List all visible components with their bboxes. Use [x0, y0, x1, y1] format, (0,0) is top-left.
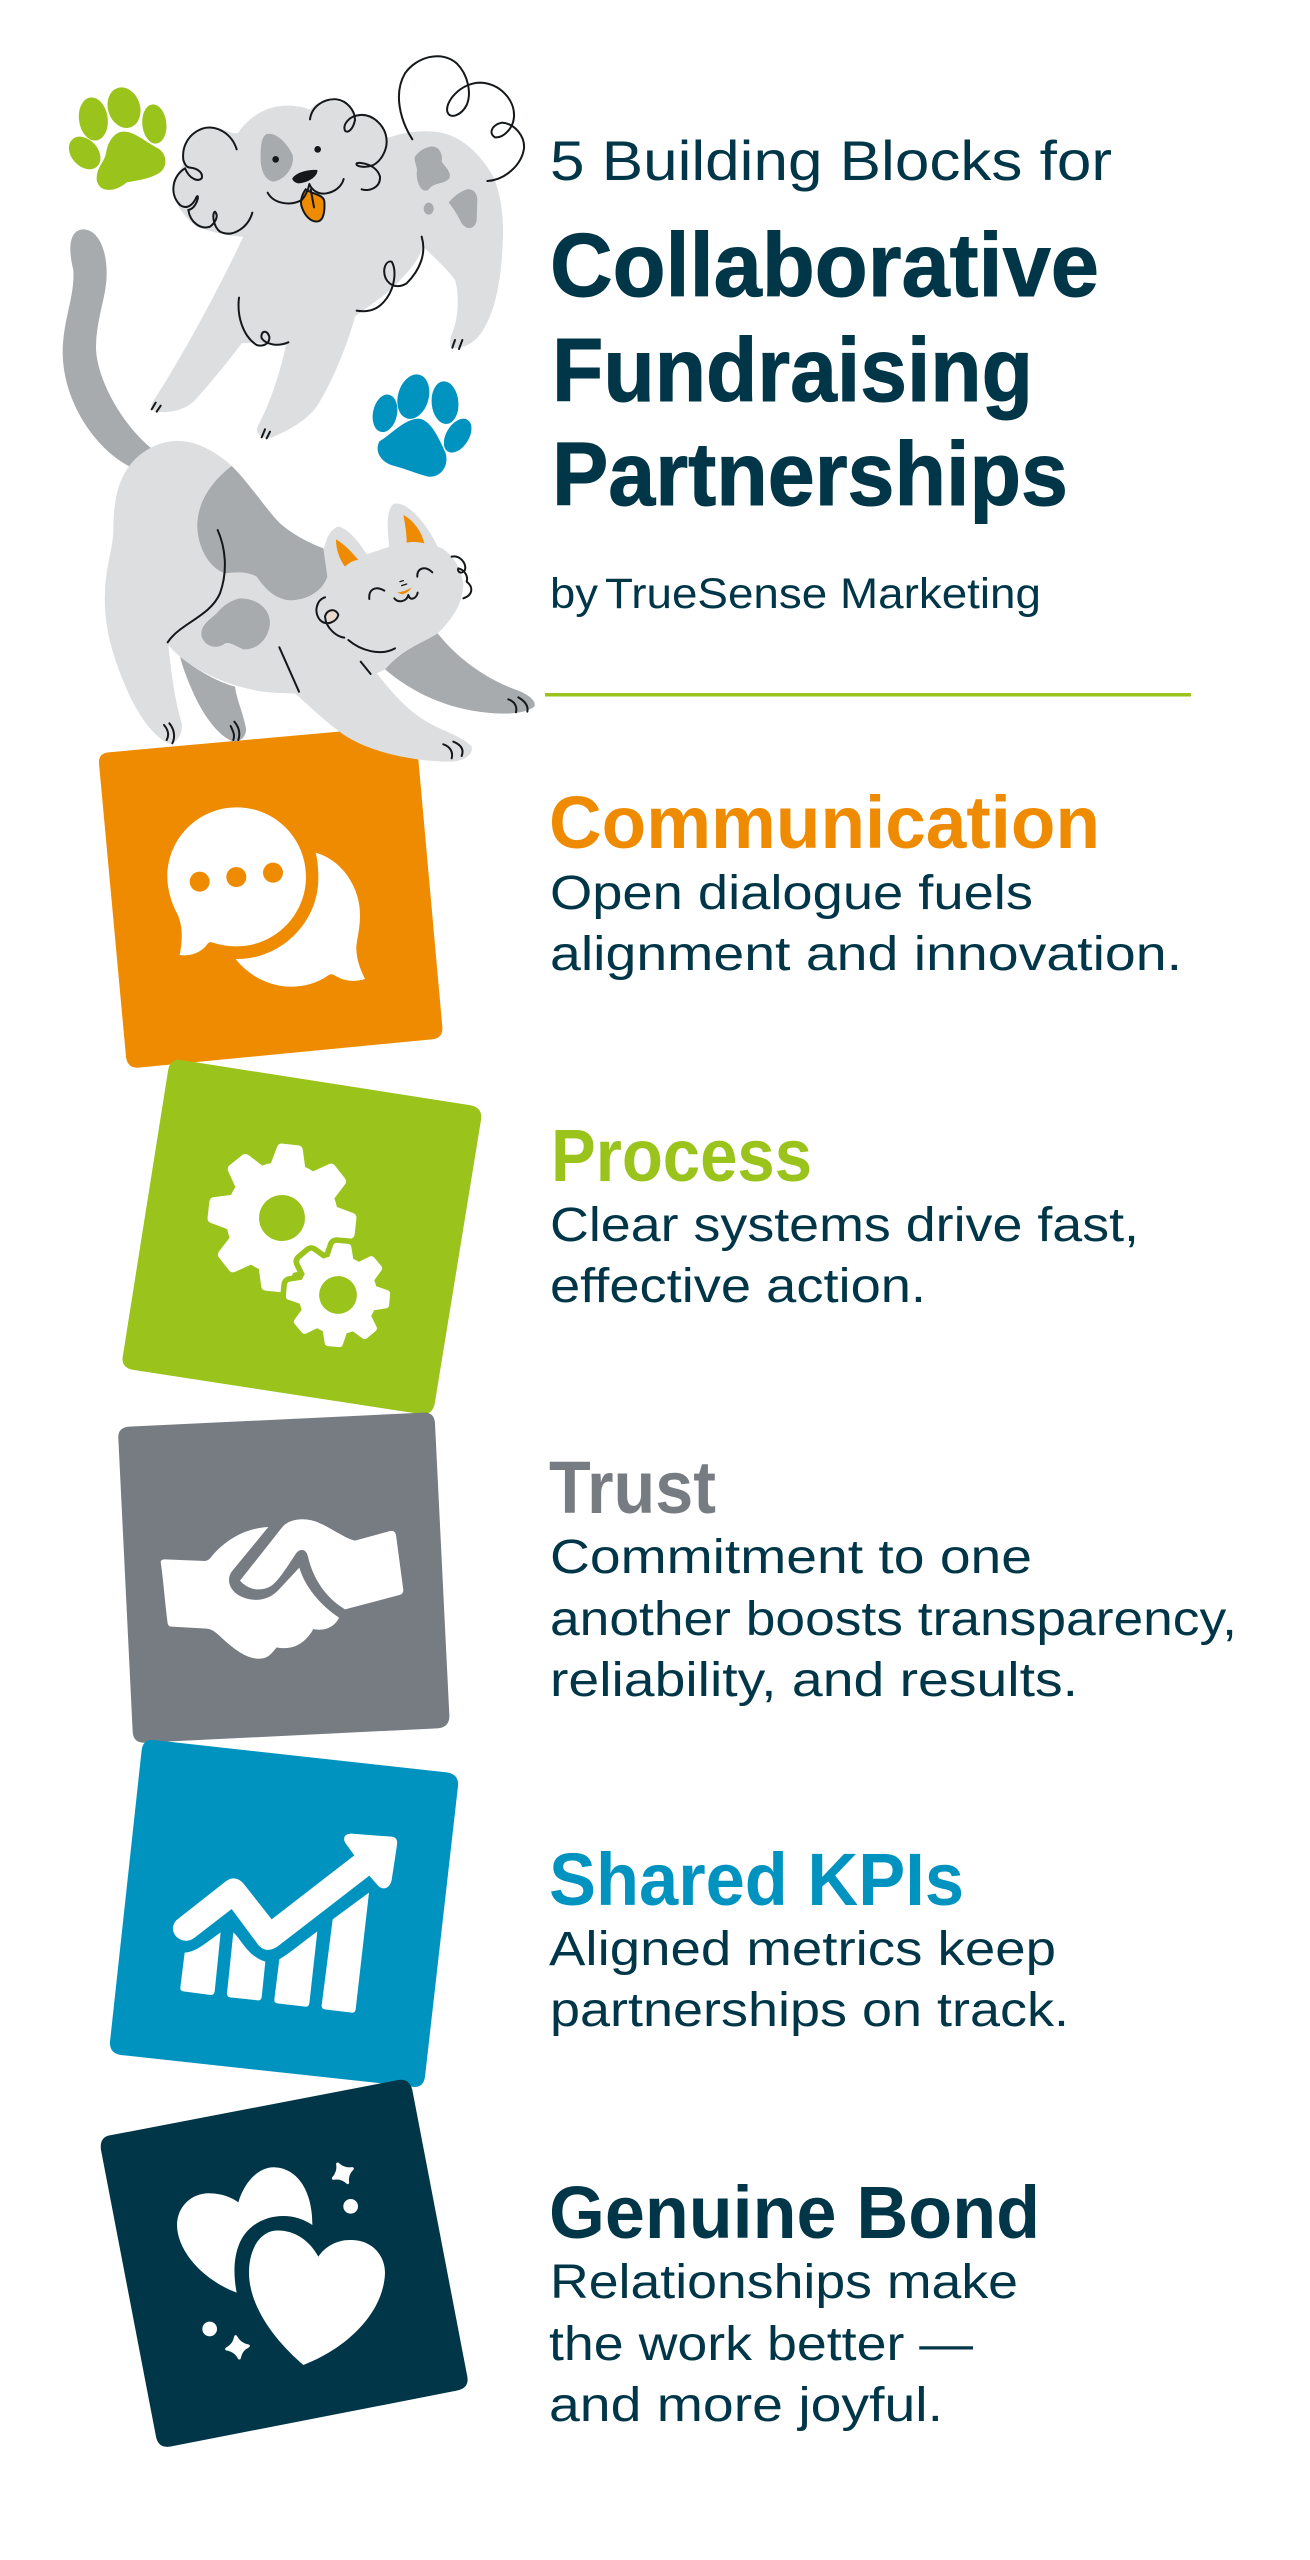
text: shared KPIs: Shared KPIs — [549, 1838, 964, 1921]
text: process: Clear systems drive fast, — [550, 1199, 1139, 1252]
title: Fundraising — [552, 321, 1033, 421]
text: communication: Communication — [549, 781, 1100, 864]
block: genuine bond — [101, 2080, 468, 2447]
block: trust — [118, 1413, 449, 1743]
text: trust: reliability, and results. — [550, 1654, 1078, 1707]
byline: by — [550, 570, 599, 618]
icon: hearts — [177, 2164, 385, 2365]
text: genuine bond: Genuine Bond — [549, 2171, 1040, 2254]
text: trust: Commitment to one — [550, 1531, 1032, 1584]
text: process: Process — [551, 1114, 812, 1197]
text: trust: another boosts transparency, — [550, 1593, 1237, 1646]
text: shared KPIs: Aligned metrics keep — [549, 1923, 1056, 1976]
text: genuine bond: and more joyful. — [549, 2379, 943, 2432]
text: process — [550, 1114, 1139, 1313]
text: genuine bond — [549, 2171, 1040, 2432]
title: 5 Building Blocks for — [550, 129, 1112, 192]
icon: blue paw — [370, 371, 476, 476]
text: genuine bond: the work better — — [549, 2318, 973, 2371]
block: process — [122, 1060, 481, 1414]
text: communication: Open dialogue fuels — [550, 867, 1033, 920]
byline: TrueSense Marketing — [605, 570, 1041, 618]
title: Partnerships — [552, 425, 1068, 525]
icon: handshake — [161, 1519, 403, 1659]
text: trust — [549, 1446, 1237, 1707]
icon: rising chart — [173, 1834, 397, 2013]
text: process: effective action. — [550, 1260, 926, 1313]
illustration: cat — [63, 229, 535, 762]
icon: speech bubbles — [167, 807, 365, 987]
text: genuine bond: Relationships make — [550, 2256, 1018, 2309]
text: trust: Trust — [549, 1446, 716, 1529]
text: communication — [549, 781, 1182, 981]
block: communication — [99, 726, 442, 1068]
block: shared KPIs — [110, 1740, 458, 2087]
text: shared KPIs — [549, 1838, 1069, 2037]
icon: gears — [200, 1136, 394, 1351]
text: shared KPIs: partnerships on track. — [550, 1984, 1069, 2037]
title — [550, 129, 1112, 525]
icon: green paw — [63, 84, 168, 189]
title: Collaborative — [550, 216, 1099, 316]
illustration: dog — [151, 56, 524, 438]
text: communication: alignment and innovation. — [550, 928, 1182, 981]
